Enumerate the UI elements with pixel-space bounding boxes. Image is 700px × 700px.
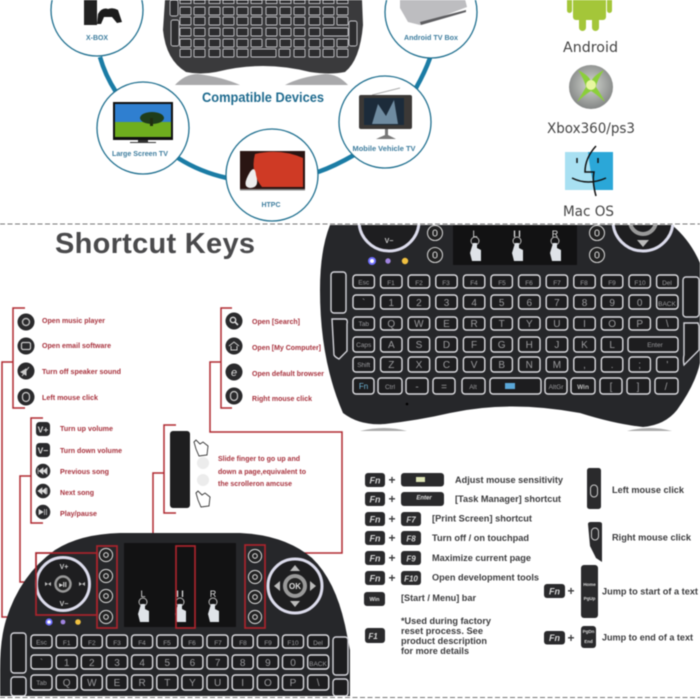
key icon: Fn end: PgDn [583, 629, 595, 634]
panel: left function annotations [2, 308, 121, 617]
key icon: Fn home: Fn [549, 586, 560, 596]
navigation dial [268, 559, 322, 613]
navigation dial: OK [289, 582, 301, 591]
label: scroll description [218, 454, 306, 488]
key icons: second keys: F8 [406, 534, 416, 544]
keys: F3 [442, 280, 450, 287]
keys: F4 [470, 280, 478, 287]
icon: speaker off [18, 362, 34, 380]
side keys [11, 633, 348, 696]
label: mouse sensitivity: Adjust mouse sensitivity [455, 475, 564, 486]
icon: email [18, 338, 34, 354]
key icon: F1 [365, 628, 385, 643]
device circle: Large Screen TV: Large Screen TV [112, 149, 168, 158]
label: Android: Android [563, 40, 618, 56]
keys: QWERTYUIOP\ [63, 678, 320, 689]
icon group: media keys: V+ [38, 424, 48, 434]
icon: home [226, 338, 242, 354]
keys: F3 [113, 640, 121, 647]
label: previous song: Previous song [60, 467, 109, 476]
keyboard: main product photo [319, 224, 700, 432]
keys: Esc [36, 640, 48, 646]
device circle: Android TV Box [385, 0, 477, 58]
keys: Enter [647, 342, 664, 349]
keys: F5 [498, 280, 506, 287]
side keys [331, 272, 699, 365]
panel: compatible devices [51, 0, 477, 221]
left dial [357, 224, 421, 254]
label: my computer: Open [My Computer] [252, 343, 321, 352]
key icons: second keys: F10 [404, 574, 418, 584]
keys: F6 [525, 280, 533, 287]
media dial [36, 558, 90, 610]
label: scroll description: down a page,equivalent to [218, 467, 306, 476]
panel: right function annotations [210, 308, 342, 553]
keys: -=[]/ [415, 382, 668, 393]
plus signs: + [388, 492, 396, 506]
key icon: Fn home [544, 565, 598, 618]
right dial [611, 224, 675, 254]
plus signs: + [388, 473, 396, 487]
touchpad: L [472, 229, 478, 239]
highlight boxes on lower keyboard [36, 545, 265, 628]
label: scroll description: Slide finger to go up and [218, 454, 300, 463]
label: scroll description: the scrolleron amcuse [218, 479, 292, 488]
plus signs: + [388, 512, 396, 526]
label: search: Open [Search] [252, 317, 300, 326]
media dial: V− [60, 601, 68, 608]
keyboard: top product photo [163, 0, 363, 85]
keys: Tab [358, 321, 369, 328]
key icons: second keys: F9 [406, 554, 416, 564]
keys: Tab [36, 680, 47, 687]
label: development tools: Open development tools [432, 572, 539, 584]
label: music player: Open music player [42, 316, 105, 325]
keys: ZXCVBNM,.;' [388, 360, 668, 371]
key icons: second keys [401, 473, 444, 585]
keys: Shift [357, 362, 370, 369]
key icons: second keys: F7 [406, 516, 416, 524]
keys: `1234567890 [40, 657, 296, 669]
label: play/pause: Play/pause [60, 509, 97, 518]
left dial: V− [385, 238, 393, 245]
keys: F8 [580, 280, 588, 287]
note: factory reset: *Used during factory [401, 616, 492, 627]
label: volume down: Turn down volume [60, 446, 122, 455]
key icons: Fn: Fn [370, 554, 381, 564]
plus signs [388, 473, 396, 585]
device circle: Large Screen TV [97, 82, 189, 174]
label: Xbox360/ps3: Xbox360/ps3 [547, 121, 635, 137]
label: left mouse click: Left mouse click [612, 485, 685, 496]
icon: swipe hands [194, 440, 210, 507]
device circle: Android TV Box: Android TV Box [404, 33, 459, 42]
key icon: Fn home: + [567, 584, 575, 598]
key icons: Fn: Fn [370, 514, 381, 524]
key icon: right mouse [588, 522, 602, 562]
key icon: Fn end: + [567, 631, 575, 645]
keys: Del [662, 280, 672, 287]
panel: Fn shortcut table [364, 473, 564, 657]
keys: F5 [163, 640, 171, 647]
keys [31, 635, 329, 690]
connector bracket: right buttons [210, 308, 342, 553]
label: next song: Next song [60, 488, 94, 497]
keys: Caps [356, 342, 372, 349]
touchpad: R [210, 589, 217, 599]
key icon: Win [364, 592, 385, 606]
keys: BACK [658, 301, 677, 308]
icon: Xbox sphere [569, 65, 613, 109]
key icon: F1: F1 [368, 632, 378, 641]
heading: Shortcut Keys: Shortcut Keys [55, 228, 255, 260]
keys: F4 [138, 640, 146, 647]
keys: AltGr [549, 384, 564, 391]
touchpad: R [552, 229, 559, 239]
touchpad: L [140, 589, 146, 599]
device circle: Mobile Vehicle TV [339, 76, 431, 168]
keys: F9 [264, 640, 272, 647]
function buttons [428, 226, 604, 262]
plus signs: + [388, 551, 396, 565]
key icon: Fn home: PgUp [584, 596, 596, 601]
icon: browser: e [231, 367, 237, 379]
label: right mouse: Right mouse click [252, 394, 313, 403]
device circle: Mobile Vehicle TV: Mobile Vehicle TV [352, 144, 416, 153]
keys: Fn [359, 382, 368, 391]
key icons: Fn [365, 473, 385, 585]
heading: compatible devices: Compatible Devices [202, 90, 324, 105]
label: start of text: Jump to start of a text [602, 586, 699, 598]
label: end of text: Jump to end of a text [602, 632, 694, 644]
keys: F6 [188, 640, 196, 647]
keys: F2 [415, 280, 423, 287]
icon: right mouse [226, 388, 242, 404]
icon: left mouse [18, 388, 34, 406]
icon: Mac finder [565, 146, 613, 196]
touch strip [170, 431, 190, 508]
keys: F7 [553, 280, 561, 287]
icon group: media keys: V− [38, 446, 48, 456]
label: email: Open email software [42, 341, 111, 350]
label: start menu: [Start / Menu] bar [401, 593, 476, 604]
icon: search [226, 312, 242, 330]
panel: scroll gesture annotation [153, 425, 306, 579]
keys: F9 [608, 280, 616, 287]
label: right mouse click: Right mouse click [612, 532, 692, 544]
keys: F7 [214, 640, 222, 647]
device circle: HTPC [226, 129, 318, 221]
connector bracket: media dial [20, 418, 43, 582]
keys: F1 [63, 640, 71, 647]
key icons: Fn: Fn [370, 574, 381, 584]
keys: ASDFGHJKL [388, 340, 615, 351]
touchpad: I I [176, 589, 184, 599]
key icon: Fn home: Home [583, 582, 596, 587]
indicator LEDs [368, 257, 408, 405]
keys: F8 [239, 640, 247, 647]
key icon: left mouse [587, 468, 601, 509]
connector bracket: scroll strip [153, 425, 176, 579]
keys [353, 275, 678, 394]
key icons: Fn: Fn [370, 534, 381, 544]
plus signs: + [388, 571, 396, 585]
function buttons [99, 548, 262, 624]
touchpad: I I [513, 229, 521, 239]
panel: mouse and navigation keys [544, 468, 699, 648]
icon: Android robot [567, 0, 612, 31]
note: factory reset: for more details [401, 646, 469, 657]
device circle: X-BOX: X-BOX [86, 33, 108, 42]
keys: F2 [88, 640, 96, 647]
label: task manager: [Task Manager] shortcut [455, 494, 562, 505]
label: maximize: Maximize current page [432, 553, 531, 564]
label: left mouse: Left mouse click [42, 393, 99, 402]
key icon: Fn end: Fn [549, 633, 560, 643]
keys: `1234567890 [362, 297, 643, 309]
keys: Esc [358, 280, 370, 286]
label: speaker off: Turn off speaker sound [42, 367, 121, 376]
label: touchpad: Turn off / on touchpad [432, 533, 529, 544]
keyboard: lower annotated photo [0, 533, 350, 696]
panel: compatible operating systems [547, 0, 635, 220]
label: browser: Open default browser [252, 369, 324, 378]
key icon: Fn end: End [584, 639, 593, 644]
note: factory reset [401, 616, 492, 657]
label: volume up: Turn up volume [60, 424, 113, 433]
touchpad [453, 225, 577, 265]
keys: Del [313, 640, 323, 647]
icon: music player [18, 314, 34, 330]
key icon: Win: Win [369, 597, 380, 603]
key icons: Fn: Fn [370, 476, 381, 486]
keys: F10 [287, 640, 299, 647]
key icons: second keys: Enter [416, 496, 432, 502]
keys: F10 [634, 280, 646, 287]
keys: BACK [309, 661, 328, 668]
touchpad [124, 543, 236, 627]
keys: F1 [387, 280, 395, 287]
connector bracket: function buttons [2, 308, 97, 617]
device circle: HTPC: HTPC [262, 200, 281, 209]
media dial: V+ [60, 564, 68, 571]
keys: Ctrl [385, 384, 396, 391]
label: Mac OS: Mac OS [563, 204, 614, 220]
icon: browser [226, 364, 242, 380]
keys: Win [577, 384, 589, 391]
icon group: media keys [36, 422, 50, 519]
plus signs: + [388, 531, 396, 545]
note: factory reset: reset process. See [401, 626, 483, 637]
label: print screen: [Print Screen] shortcut [432, 514, 533, 524]
note: factory reset: product description [401, 636, 487, 647]
panel: volume annotations [20, 418, 122, 582]
indicator LEDs [45, 618, 81, 626]
key icons: Fn: Fn [370, 494, 381, 504]
keys: Alt [469, 384, 477, 391]
key icon: Fn end [544, 626, 596, 648]
media dial: ▸II [58, 582, 67, 589]
device circle: X-BOX [51, 0, 143, 56]
keys: QWERTYUIOP\ [387, 319, 669, 330]
